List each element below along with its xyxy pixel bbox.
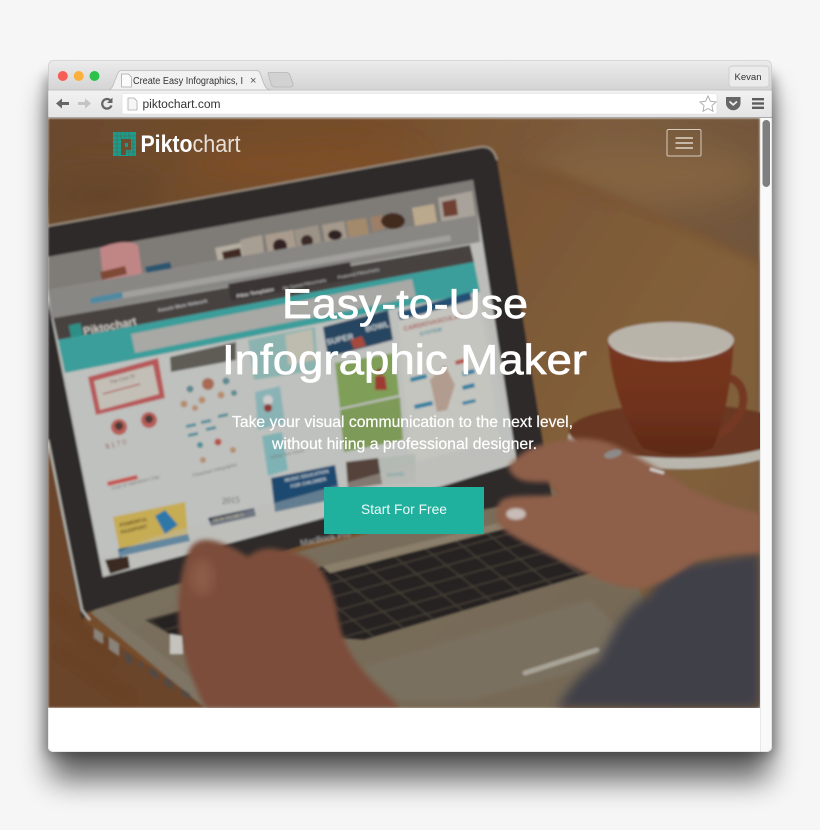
headline [222, 280, 587, 383]
subheading: without hiring a professional designer. [271, 436, 537, 453]
pink illustration [100, 242, 143, 286]
browser toolbar [48, 90, 772, 118]
template card: music education: MUSIC EDUCATION [284, 469, 330, 484]
star icon [700, 96, 716, 111]
template card: music education: FOR CHILDREN [290, 476, 327, 490]
mini logo and nav text [69, 267, 380, 339]
blurred wood tones [40, 145, 760, 217]
table edge shadow [760, 261, 761, 262]
trackpad [411, 604, 608, 698]
safari toolbar strip [48, 180, 478, 290]
browser title bar [48, 60, 772, 90]
back arrow [56, 98, 69, 108]
address bar [122, 94, 717, 114]
teal banner [58, 262, 480, 373]
active tab: × [250, 75, 256, 87]
mini logo and nav text: Piktochart [82, 316, 138, 338]
subheading [232, 414, 573, 453]
logo mark [113, 132, 136, 156]
template card: passport [113, 502, 190, 570]
template card: green football [335, 353, 403, 452]
mini logo and nav text: Pikto Templates [236, 287, 275, 300]
scrollbar [760, 118, 772, 752]
template card: super bowl: BOWL [364, 320, 390, 334]
keyboard [146, 524, 590, 641]
table top [400, 163, 760, 708]
template card: cost: The Cost Of [109, 373, 136, 386]
wall background [48, 118, 760, 708]
template card: super bowl: SUPER [325, 332, 355, 347]
sleeve [557, 553, 760, 708]
side ports [94, 628, 190, 700]
mini logo and nav text: Aussie Mum Network [157, 298, 208, 314]
search field [131, 279, 416, 353]
template card: music education [271, 465, 340, 512]
template card: cardiovascular system: SYSTEM [419, 327, 443, 338]
template card: new years [208, 494, 256, 526]
hand highlight [190, 559, 214, 595]
mini logo and nav text: Featured Piktocharts [337, 267, 380, 280]
template card: cost: Cost of Valentine's Day [111, 474, 161, 492]
template card: travel: TRAVEL [386, 471, 406, 479]
template card: cost: $ 1 7 0 [105, 439, 127, 451]
wood bottom left [49, 558, 202, 708]
browser window [40, 60, 792, 752]
active tab [107, 70, 272, 90]
template card: super bowl [323, 310, 393, 357]
laptop lid bezel [48, 147, 552, 620]
mini logo and nav text: My Saved Piktocharts [282, 277, 327, 291]
dark navigation band [53, 245, 474, 340]
template card: cardiovascular system [398, 292, 500, 462]
photo thumbnails [100, 191, 476, 286]
template card: selling your house [248, 327, 318, 476]
saucer [566, 406, 760, 471]
browser chrome band [48, 215, 480, 318]
template card: new years: 2015 [221, 494, 241, 506]
template card: selling your house: Selling Your House [269, 448, 305, 460]
forward arrow [78, 98, 91, 108]
profile button: Kevan [734, 72, 762, 83]
laptop screen [48, 180, 517, 577]
pocket icon [726, 97, 740, 110]
hero white lower section [48, 708, 760, 752]
screen bottom frame [100, 440, 517, 577]
laptop base [91, 486, 660, 708]
template card: flowchart: Flowchart Infographic [192, 462, 239, 479]
piktochart logo [113, 131, 241, 158]
active tab: Create Easy Infographics, I [133, 76, 243, 87]
hero photograph [40, 118, 792, 708]
address pill [122, 235, 451, 298]
profile button [729, 66, 769, 87]
address bar: piktochart.com [142, 97, 220, 111]
logo wordmark: Piktochart [140, 131, 241, 158]
headline: Infographic Maker [222, 336, 587, 383]
template card: cost [88, 358, 165, 492]
template card: travel [346, 454, 416, 489]
subheading: Take your visual communication to the next level, [232, 414, 573, 431]
template card: passport: POWERFUL [119, 517, 148, 529]
window drop shadow [45, 74, 775, 780]
macbook label: MacBook Pro [299, 528, 352, 548]
template card: passport: PASSPORT [120, 524, 148, 536]
call to action button: Start For Free [361, 501, 447, 517]
white cuff detail [170, 634, 183, 654]
hamburger menu button [667, 130, 701, 156]
coffee cup [608, 322, 743, 455]
template card: cardiovascular system: CARDIOVASCULAR [403, 312, 464, 333]
headline: Easy-to-Use [282, 280, 528, 327]
new tab button [268, 72, 293, 87]
template card: flowchart [170, 342, 239, 479]
left hand [178, 540, 401, 708]
reload icon [102, 98, 112, 109]
menu icon [752, 98, 764, 109]
right hand [496, 438, 760, 588]
call to action button [324, 487, 484, 534]
page white area [380, 299, 444, 312]
template card: new years: NEW YEAR'S [212, 513, 244, 524]
window controls [58, 71, 100, 81]
